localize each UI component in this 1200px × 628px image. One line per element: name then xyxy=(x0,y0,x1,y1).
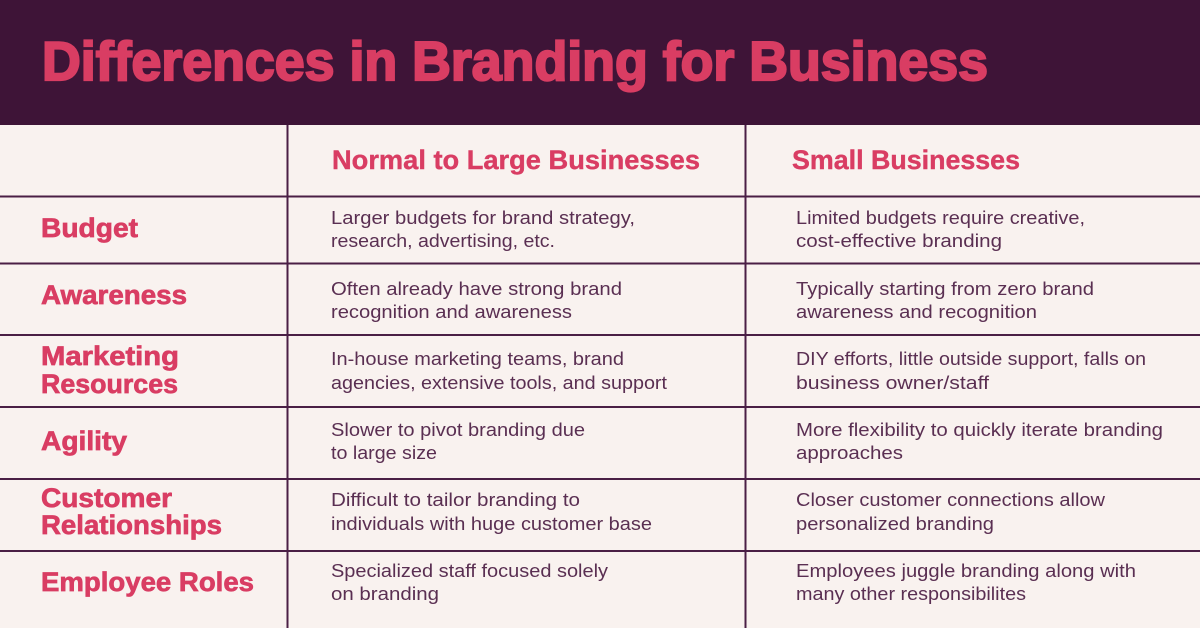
label: customer relationships: Relationships xyxy=(41,510,222,540)
row: awareness xyxy=(41,278,1094,322)
large business employee text xyxy=(331,560,609,604)
label: agility: Agility xyxy=(41,426,127,456)
large business awareness text: recognition and awareness xyxy=(331,301,572,322)
column heading: small businesses: Small Businesses xyxy=(792,145,1020,175)
small business budget text: cost-effective branding xyxy=(796,230,1002,251)
column heading: normal to large businesses: Normal to Large Businesses xyxy=(332,145,700,175)
row: budget xyxy=(41,207,1085,251)
large business customer text: individuals with huge customer base xyxy=(331,513,652,534)
label: employee roles: Employee Roles xyxy=(41,567,254,597)
small business awareness text: awareness and recognition xyxy=(796,301,1037,322)
large business budget text: Larger budgets for brand strategy, xyxy=(331,207,635,228)
small business agility text: approaches xyxy=(796,442,903,463)
small business awareness text xyxy=(796,278,1094,322)
small business marketing text xyxy=(796,348,1146,393)
table header row xyxy=(332,145,1020,175)
large business budget text xyxy=(331,207,635,251)
large business employee text: on branding xyxy=(331,583,439,604)
label: marketing resources: Resources xyxy=(41,369,178,399)
row: marketing resources xyxy=(41,341,1146,399)
large business awareness text xyxy=(331,278,622,322)
large business marketing text: In-house marketing teams, brand xyxy=(331,348,624,369)
label: marketing resources xyxy=(41,341,179,399)
label: customer relationships: Customer xyxy=(41,483,173,513)
label: customer relationships xyxy=(41,483,222,540)
large business customer text: Difficult to tailor branding to xyxy=(331,489,580,510)
label: budget: Budget xyxy=(41,213,138,243)
small business customer text: Closer customer connections allow xyxy=(796,489,1106,510)
small business budget text xyxy=(796,207,1085,251)
label: awareness: Awareness xyxy=(41,280,187,310)
small business marketing text: business owner/staff xyxy=(796,372,990,393)
small business marketing text: DIY efforts, little outside support, falls on xyxy=(796,348,1146,369)
row: customer relationships xyxy=(41,483,1106,540)
small business employee text: many other responsibilites xyxy=(796,583,1026,604)
large business marketing text: agencies, extensive tools, and support xyxy=(331,372,667,393)
large business employee text: Specialized staff focused solely xyxy=(331,560,609,581)
small business employee text: Employees juggle branding along with xyxy=(796,560,1136,581)
title banner xyxy=(0,0,1200,125)
large business customer text xyxy=(331,489,652,534)
small business customer text: personalized branding xyxy=(796,513,994,534)
small business employee text xyxy=(796,560,1136,604)
small business agility text xyxy=(796,419,1163,463)
row: employee roles xyxy=(41,560,1136,604)
large business agility text: to large size xyxy=(331,442,437,463)
title: Differences in Branding for Business xyxy=(42,30,988,92)
large business agility text: Slower to pivot branding due xyxy=(331,419,585,440)
small business customer text xyxy=(796,489,1106,534)
large business budget text: research, advertising, etc. xyxy=(331,230,555,251)
small business awareness text: Typically starting from zero brand xyxy=(796,278,1094,299)
small business agility text: More flexibility to quickly iterate branding xyxy=(796,419,1163,440)
row: agility xyxy=(41,419,1163,463)
large business awareness text: Often already have strong brand xyxy=(331,278,622,299)
label: marketing resources: Marketing xyxy=(41,341,179,371)
small business budget text: Limited budgets require creative, xyxy=(796,207,1085,228)
large business marketing text xyxy=(331,348,667,393)
large business agility text xyxy=(331,419,585,463)
